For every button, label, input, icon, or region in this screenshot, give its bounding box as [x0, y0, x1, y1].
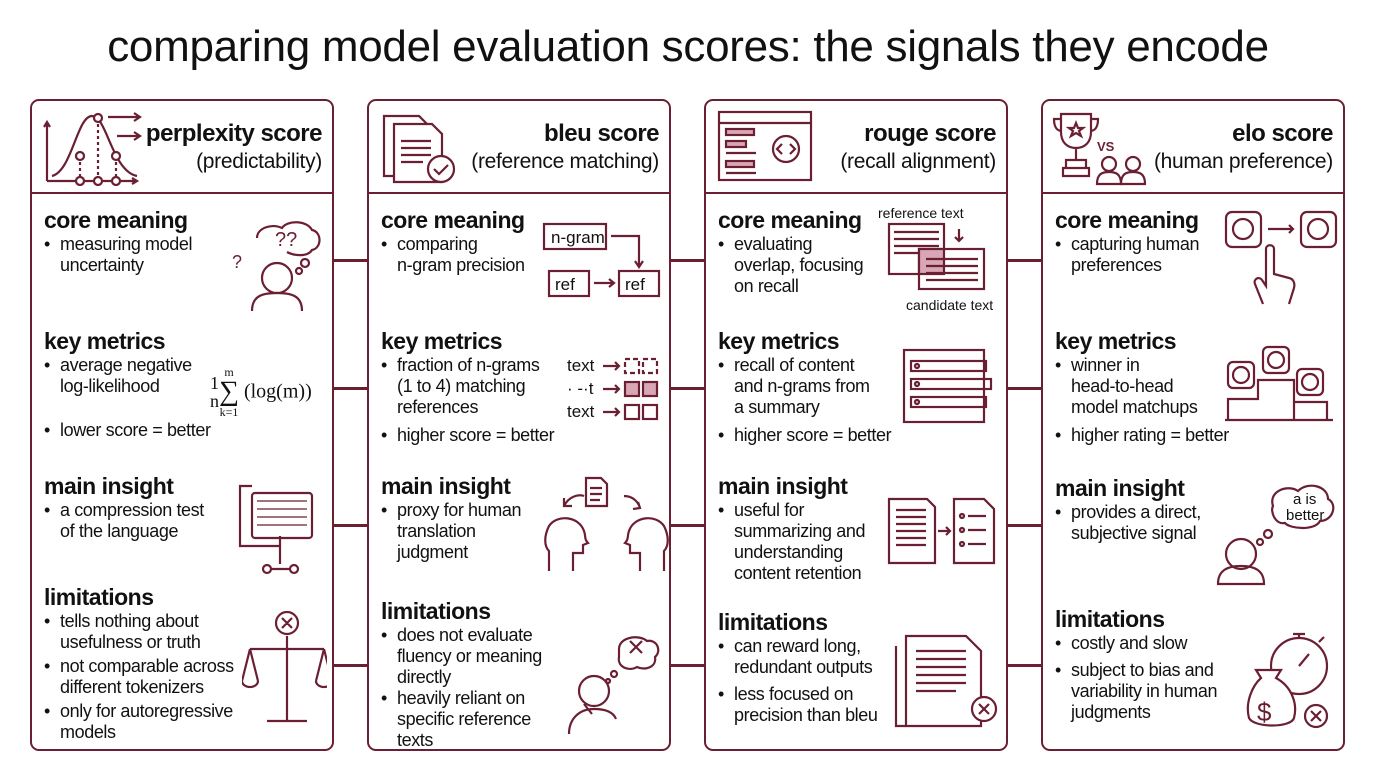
formula: 1 [210, 373, 219, 393]
key metrics: higher rating = better [1071, 425, 1229, 445]
icon: model choice hand [1224, 210, 1338, 304]
core meaning: preferences [1071, 255, 1162, 275]
core meaning [1055, 207, 1199, 275]
icon: scale [242, 611, 327, 722]
limitations: limitations [381, 598, 491, 624]
core meaning [381, 207, 525, 275]
limitations: redundant outputs [734, 657, 872, 677]
formula: n [210, 391, 219, 411]
icon: confused person [232, 221, 321, 311]
main insight [381, 473, 521, 562]
icon: list doc [902, 348, 992, 424]
header: bleu [369, 101, 669, 194]
header: elo: elo score [1232, 120, 1333, 147]
limitations: limitations [1055, 606, 1165, 632]
limitations: judgments [1071, 702, 1150, 722]
icon: trophy vs people: VS [1097, 139, 1115, 154]
key metrics: higher score = better [734, 425, 891, 445]
key metrics: and n-grams from [734, 376, 870, 396]
core meaning [44, 207, 192, 275]
icon: smiling person: a is [1293, 491, 1316, 508]
limitations: does not evaluate [397, 625, 532, 645]
limitations [44, 584, 234, 742]
key metrics [44, 328, 211, 440]
icon: confused person: ?? [275, 229, 297, 251]
icon: money bag stopwatch: $ [1257, 697, 1272, 727]
icon: thinking person [568, 636, 660, 734]
main insight: provides a direct, [1071, 502, 1201, 522]
formula: m [224, 365, 234, 379]
limitations: fluency or meaning [397, 646, 542, 666]
icon: n-gram diagram: ref [555, 275, 575, 294]
key metrics [1055, 328, 1229, 445]
formula: k=1 [220, 405, 238, 419]
limitations [718, 609, 878, 725]
header: perplexity [32, 101, 332, 194]
key metrics: (1 to 4) matching [397, 376, 525, 396]
header: bleu: (reference matching) [471, 150, 659, 173]
header: perplexity: (predictability) [196, 150, 322, 173]
icon: reference vs candidate: candidate text [906, 297, 993, 313]
icon: smiling person: better [1286, 507, 1324, 524]
limitations: only for autoregressive [60, 701, 233, 721]
core meaning: core meaning [1055, 207, 1199, 233]
limitations: specific reference [397, 709, 531, 729]
key metrics: log-likelihood [60, 376, 159, 396]
icon: trophy vs people [1052, 112, 1146, 186]
icon: clamp [238, 484, 314, 574]
panel: rouge [704, 99, 1008, 751]
key metrics: key metrics [381, 328, 502, 354]
core meaning: core meaning [718, 207, 862, 233]
limitations: not comparable across [60, 656, 234, 676]
limitations: different tokenizers [60, 677, 204, 697]
main insight: main insight [44, 473, 173, 499]
main insight: of the language [60, 521, 178, 541]
limitations: limitations [718, 609, 828, 635]
key metrics: higher score = better [397, 425, 554, 445]
main insight: subjective signal [1071, 523, 1196, 543]
title: comparing model evaluation scores: the signals they encode [107, 22, 1269, 71]
header: elo [1043, 101, 1343, 194]
key metrics: fraction of n-grams [397, 355, 539, 375]
icon: text grid: text [567, 402, 595, 421]
limitations: limitations [44, 584, 154, 610]
key metrics: recall of content [734, 355, 854, 375]
main insight: main insight [1055, 475, 1184, 501]
limitations: tells nothing about [60, 611, 199, 631]
icon: doc to list [888, 498, 996, 564]
icon: n-gram diagram [542, 222, 660, 298]
icon: text grid [567, 356, 658, 421]
icon: smiling person [1216, 484, 1334, 586]
formula [210, 365, 312, 419]
key metrics: head-to-head [1071, 376, 1173, 396]
icon: reference vs candidate: reference text [878, 205, 964, 221]
limitations: usefulness or truth [60, 632, 200, 652]
limitations: variability in human [1071, 681, 1217, 701]
icon: podium [1225, 346, 1333, 422]
core meaning: capturing human [1071, 234, 1199, 254]
core meaning [718, 207, 863, 296]
formula: (log(m)) [244, 380, 312, 402]
limitations [1055, 606, 1217, 722]
main insight: a compression test [60, 500, 204, 520]
main insight [718, 473, 865, 583]
main insight: proxy for human [397, 500, 521, 520]
limitations: costly and slow [1071, 633, 1187, 653]
formula: ∑ [219, 376, 239, 407]
key metrics: model matchups [1071, 397, 1197, 417]
key metrics: references [397, 397, 478, 417]
icon: n-gram diagram: ref [625, 275, 645, 294]
limitations: subject to bias and [1071, 660, 1214, 680]
core meaning: n-gram precision [397, 255, 525, 275]
icon: code document [718, 110, 812, 182]
main insight [44, 473, 204, 541]
header: perplexity: perplexity score [146, 120, 322, 147]
header: elo: (human preference) [1154, 150, 1333, 173]
main insight: translation [397, 521, 476, 541]
icon: money bag stopwatch [1246, 632, 1328, 728]
icon: text grid: · -·t [567, 379, 594, 398]
core meaning: on recall [734, 276, 798, 296]
core meaning: core meaning [381, 207, 525, 233]
core meaning: comparing [397, 234, 477, 254]
key metrics: key metrics [718, 328, 839, 354]
header: rouge: (recall alignment) [840, 150, 996, 173]
panel: bleu [367, 99, 671, 751]
limitations: precision than bleu [734, 705, 878, 725]
panel: perplexity [30, 99, 334, 751]
main insight: main insight [381, 473, 510, 499]
icon: two heads [544, 476, 669, 571]
key metrics [381, 328, 554, 445]
main insight: judgment [397, 542, 468, 562]
key metrics: winner in [1071, 355, 1139, 375]
icon: reference vs candidate [878, 205, 994, 313]
main insight: content retention [734, 563, 861, 583]
header: rouge [706, 101, 1006, 194]
icon: bell curve [43, 112, 142, 186]
limitations: heavily reliant on [397, 688, 525, 708]
key metrics: key metrics [44, 328, 165, 354]
main insight: main insight [718, 473, 847, 499]
key metrics: a summary [734, 397, 819, 417]
key metrics: average negative [60, 355, 192, 375]
limitations: can reward long, [734, 636, 861, 656]
limitations: models [60, 722, 116, 742]
core meaning: core meaning [44, 207, 188, 233]
header: bleu: bleu score [544, 120, 659, 147]
icon: confused person: ? [232, 252, 242, 272]
limitations: texts [397, 730, 433, 750]
limitations [381, 598, 542, 750]
core meaning: uncertainty [60, 255, 144, 275]
icon: n-gram diagram: n-gram [551, 228, 605, 247]
main insight: summarizing and [734, 521, 865, 541]
core meaning: measuring model [60, 234, 192, 254]
core meaning: evaluating [734, 234, 812, 254]
main insight [1055, 475, 1201, 543]
header: rouge: rouge score [864, 120, 996, 147]
key metrics: lower score = better [60, 420, 211, 440]
key metrics: key metrics [1055, 328, 1176, 354]
limitations: less focused on [734, 684, 853, 704]
key metrics [718, 328, 892, 445]
panel: elo [1041, 99, 1345, 751]
connectors [334, 99, 1334, 751]
main insight: understanding [734, 542, 843, 562]
icon: documents check [382, 114, 456, 184]
icon: text grid: text [567, 356, 595, 375]
limitations: directly [397, 667, 451, 687]
main insight: useful for [734, 500, 804, 520]
icon: long scroll with x [894, 634, 998, 728]
core meaning: overlap, focusing [734, 255, 863, 275]
